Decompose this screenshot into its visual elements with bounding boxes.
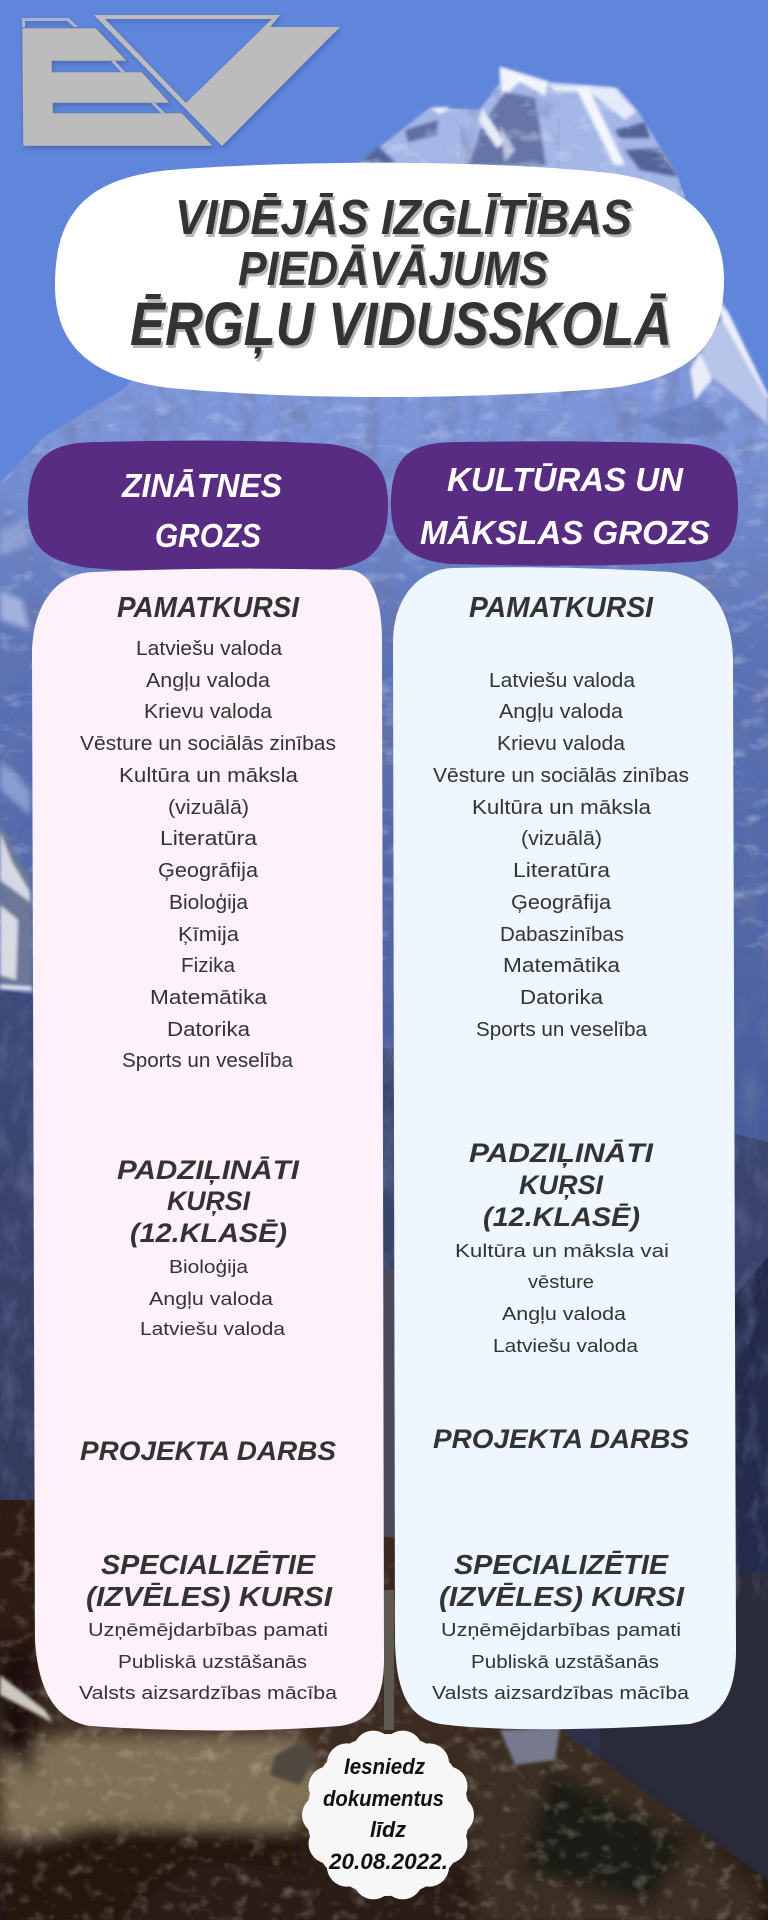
heading: Padziļināti kursi: (12.KLASĒ) bbox=[483, 1202, 640, 1232]
logo letter E bbox=[22, 28, 213, 146]
title text: ĒRGĻU VIDUSSKOLĀ bbox=[130, 290, 672, 359]
heading: Padziļināti kursi bbox=[117, 1155, 300, 1248]
list: Pamatkursi courses: Ģeogrāfija bbox=[511, 892, 612, 914]
mountain right snow ridge bbox=[640, 300, 768, 440]
list: Pamatkursi courses: Literatūra bbox=[160, 828, 258, 850]
list: Pamatkursi courses: Vēsture un sociālās zinības bbox=[433, 765, 689, 787]
list: Pamatkursi courses: Sports un veselība bbox=[122, 1050, 294, 1072]
heading: Specializētie kursi: SPECIALIZĒTIE bbox=[454, 1549, 669, 1580]
list: Pamatkursi courses: (vizuālā) bbox=[521, 828, 602, 850]
list: Pamatkursi courses: Bioloģija bbox=[169, 892, 249, 914]
panel: Zinātnes grozs header: ZINĀTNES bbox=[121, 467, 282, 504]
list: Pamatkursi courses: Datorika bbox=[167, 1019, 251, 1041]
list: Pamatkursi courses bbox=[80, 638, 336, 1072]
foreground hillside bbox=[0, 1270, 768, 1920]
list: Pamatkursi courses: Sports un veselība bbox=[476, 1019, 648, 1041]
heading: Projekta darbs: PROJEKTA DARBS bbox=[433, 1424, 689, 1454]
list: Padziļināti courses: Kultūra un māksla vai bbox=[455, 1241, 669, 1261]
heading: Padziļināti kursi: KUŖSI bbox=[167, 1186, 250, 1216]
list: Padziļināti courses: vēsture bbox=[528, 1272, 594, 1292]
heading: Pamatkursi: PAMATKURSI bbox=[117, 592, 300, 624]
list: Pamatkursi courses: Krievu valoda bbox=[497, 733, 626, 755]
mountain left rock face bbox=[0, 520, 30, 815]
badge: document deadline bbox=[302, 1731, 474, 1899]
list: Pamatkursi courses: (vizuālā) bbox=[168, 797, 249, 819]
title panel bbox=[55, 163, 724, 397]
mountain left snowy rock band bbox=[0, 823, 32, 991]
mountain peak snow and rock bbox=[360, 60, 690, 200]
panel: Kultūras un mākslas grozs header bbox=[391, 441, 738, 566]
heading: Specializētie kursi: SPECIALIZĒTIE bbox=[101, 1549, 316, 1580]
badge text bbox=[323, 1754, 448, 1874]
list: Pamatkursi courses: Matemātika bbox=[503, 955, 621, 977]
heading: Padziļināti kursi: (12.KLASĒ) bbox=[130, 1218, 287, 1248]
list: Pamatkursi courses: Dabaszinības bbox=[500, 924, 624, 946]
list: Specializētie courses: Publiskā uzstāšanās bbox=[471, 1652, 659, 1672]
list: Pamatkursi courses: Ģeogrāfija bbox=[158, 860, 259, 882]
list: Specializētie courses: Valsts aizsardzības mācība bbox=[432, 1683, 690, 1703]
heading: Padziļināti kursi bbox=[469, 1138, 654, 1232]
panel: Zinātnes grozs header bbox=[28, 441, 388, 573]
logo: EV bbox=[22, 15, 340, 146]
list: Specializētie courses: Uzņēmējdarbības pamati bbox=[88, 1620, 328, 1640]
heading: Specializētie kursi: (IZVĒLES) KURSI bbox=[439, 1581, 685, 1612]
title text: PIEDĀVĀJUMS bbox=[240, 246, 550, 299]
list: Specializētie courses: Uzņēmējdarbības pamati bbox=[441, 1620, 681, 1640]
list: Padziļināti courses: Latviešu valoda bbox=[140, 1319, 286, 1339]
list: Pamatkursi courses: Literatūra bbox=[513, 860, 611, 882]
title text: PIEDĀVĀJUMS bbox=[238, 243, 548, 296]
list: Specializētie courses: Valsts aizsardzības mācība bbox=[79, 1683, 338, 1703]
panel: Zinātnes grozs header: GROZS bbox=[155, 517, 261, 554]
list: Padziļināti courses bbox=[140, 1257, 286, 1339]
heading: Pamatkursi: PAMATKURSI bbox=[469, 592, 654, 624]
list: Pamatkursi courses: Fizika bbox=[181, 955, 236, 977]
panel: Kultūras un mākslas grozs courses bbox=[393, 567, 736, 1729]
list: Padziļināti courses: Angļu valoda bbox=[502, 1304, 627, 1324]
logo triangle and letter V bbox=[94, 15, 340, 146]
list: Pamatkursi courses: Datorika bbox=[520, 987, 604, 1009]
list: Padziļināti courses: Latviešu valoda bbox=[493, 1336, 639, 1356]
list: Specializētie courses bbox=[432, 1620, 690, 1703]
list: Padziļināti courses: Bioloģija bbox=[169, 1257, 249, 1277]
title text bbox=[130, 191, 674, 362]
list: Specializētie courses bbox=[79, 1620, 338, 1703]
title text: VIDĒJĀS IZGLĪTĪBAS bbox=[175, 191, 632, 245]
heading: Specializētie kursi bbox=[439, 1549, 685, 1612]
title text: ĒRGĻU VIDUSSKOLĀ bbox=[132, 293, 674, 362]
title text: VIDĒJĀS IZGLĪTĪBAS bbox=[177, 194, 634, 248]
list: Pamatkursi courses: Vēsture un sociālās zinības bbox=[80, 733, 336, 755]
badge text: Iesniedz bbox=[344, 1754, 425, 1779]
list: Pamatkursi courses: Kultūra un māksla bbox=[472, 797, 652, 819]
heading: Padziļināti kursi: KUŖSI bbox=[519, 1170, 603, 1200]
badge scalloped shape bbox=[302, 1731, 474, 1899]
panel: Kultūras un mākslas grozs header: MĀKSLAS GROZS bbox=[420, 514, 710, 551]
list: Pamatkursi courses: Kultūra un māksla bbox=[119, 765, 299, 787]
list: Pamatkursi courses bbox=[433, 670, 689, 1041]
list: Padziļināti courses: Angļu valoda bbox=[149, 1289, 274, 1309]
badge text: līdz bbox=[370, 1817, 406, 1842]
list: Pamatkursi courses: Angļu valoda bbox=[146, 670, 271, 692]
list: Pamatkursi courses: Latviešu valoda bbox=[489, 670, 636, 692]
heading: Specializētie kursi: (IZVĒLES) KURSI bbox=[86, 1581, 333, 1612]
badge text: dokumentus bbox=[323, 1786, 444, 1811]
list: Padziļināti courses bbox=[455, 1241, 669, 1356]
heading: Projekta darbs: PROJEKTA DARBS bbox=[80, 1436, 336, 1466]
heading: Specializētie kursi bbox=[86, 1549, 333, 1612]
panel: Kultūras un mākslas grozs header: KULTŪRAS UN bbox=[447, 461, 684, 498]
list: Pamatkursi courses: Krievu valoda bbox=[144, 701, 273, 723]
list: Pamatkursi courses: Matemātika bbox=[150, 987, 268, 1009]
list: Specializētie courses: Publiskā uzstāšanās bbox=[118, 1652, 307, 1672]
list: Pamatkursi courses: Angļu valoda bbox=[499, 701, 624, 723]
panel: Zinātnes grozs courses bbox=[32, 569, 384, 1730]
list: Pamatkursi courses: Latviešu valoda bbox=[136, 638, 283, 660]
heading: Padziļināti kursi: PADZIĻINĀTI bbox=[469, 1138, 654, 1168]
badge text: 20.08.2022. bbox=[328, 1849, 448, 1874]
heading: Padziļināti kursi: PADZIĻINĀTI bbox=[117, 1155, 300, 1185]
list: Pamatkursi courses: Ķīmija bbox=[178, 924, 240, 946]
